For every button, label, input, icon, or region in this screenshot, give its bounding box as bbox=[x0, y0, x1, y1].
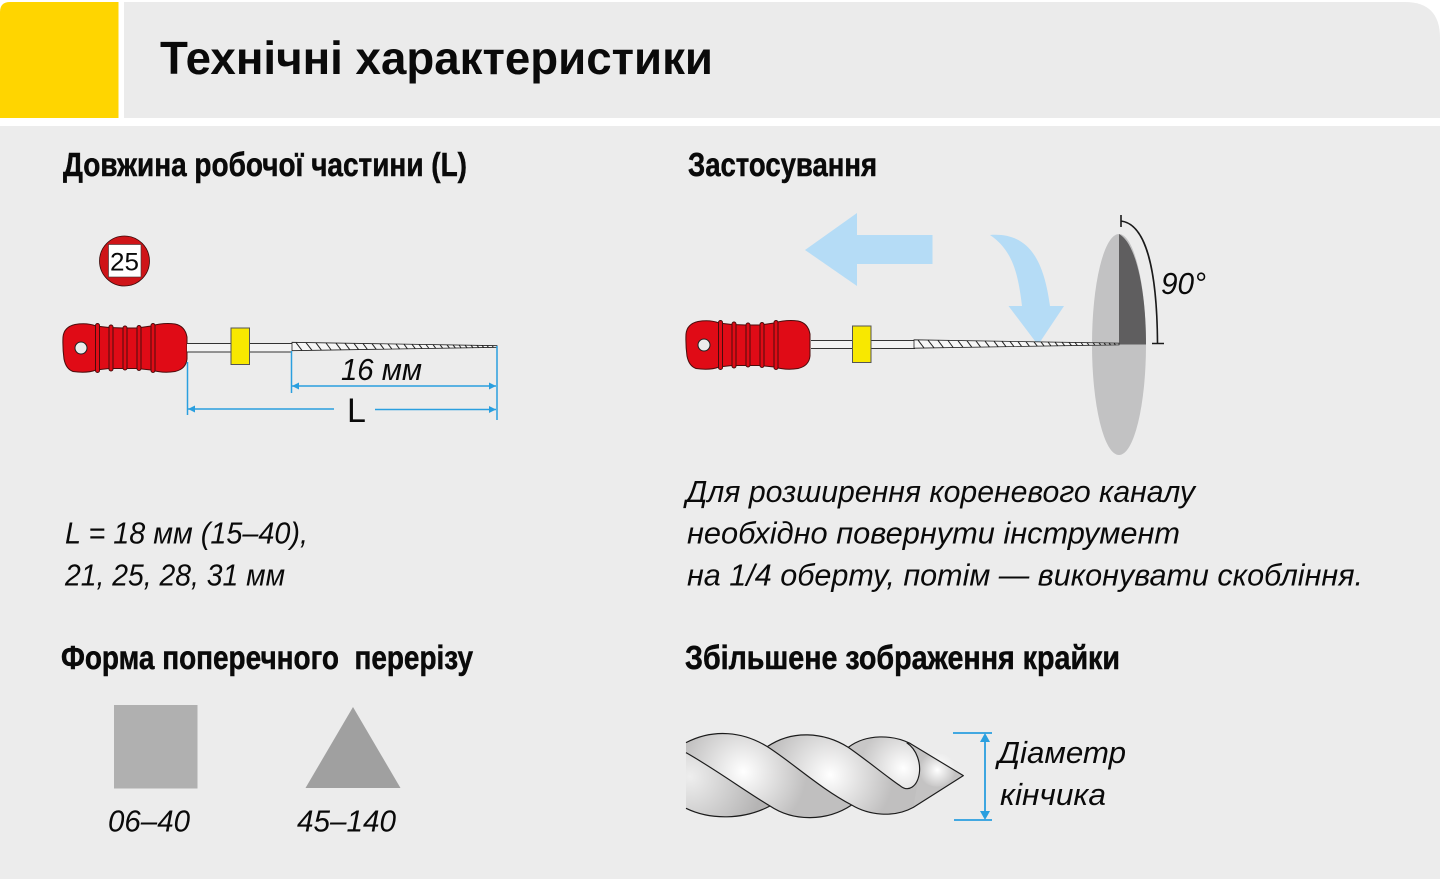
application description: Для розширення кореневого каналу bbox=[683, 474, 1197, 509]
yellow header block bbox=[0, 2, 118, 118]
icon: size 25 badge bbox=[100, 236, 150, 286]
cross-section: square: 06–40 bbox=[108, 804, 190, 838]
twisted working part bbox=[914, 340, 1119, 348]
dimension arrowheads bbox=[188, 382, 496, 413]
title: Технічні характеристики bbox=[160, 32, 713, 84]
application description: необхідно повернути інструмент bbox=[687, 516, 1180, 550]
application description bbox=[683, 474, 1363, 592]
shaft bbox=[187, 344, 300, 352]
cross-section: triangle: 45–140 bbox=[297, 804, 396, 838]
heading: enlarged tip: Збільшене зображення крайки bbox=[685, 639, 1120, 676]
length values: L = 18 мм (15–40), bbox=[65, 516, 308, 550]
length values bbox=[64, 516, 308, 592]
silicone stopper bbox=[231, 328, 250, 364]
application description: на 1/4 оберту, потім — виконувати скобління. bbox=[687, 558, 1363, 592]
first flute bbox=[686, 733, 852, 818]
middle flute bbox=[767, 735, 919, 814]
arrow: withdrawal bbox=[805, 213, 932, 286]
heading: application: Застосування bbox=[688, 146, 877, 183]
label: 90 degrees: 90° bbox=[1161, 266, 1206, 301]
cross-section: square bbox=[108, 705, 198, 838]
arrow: quarter turn bbox=[990, 235, 1064, 345]
lower wedge bbox=[686, 753, 770, 817]
silicone stopper bbox=[852, 326, 871, 362]
diagram: file with length dimensions bbox=[63, 324, 497, 430]
dimension lines bbox=[188, 346, 497, 420]
silhouette bbox=[686, 733, 963, 818]
illustration: enlarged tip bbox=[686, 733, 963, 818]
diagram: rotation of the file bbox=[686, 213, 1206, 455]
outlines bbox=[686, 733, 963, 818]
cross-section: triangle bbox=[297, 707, 400, 838]
twisted working part bbox=[292, 342, 497, 351]
length values: 21, 25, 28, 31 мм bbox=[64, 558, 285, 592]
header bar bbox=[124, 2, 1440, 118]
tip diameter dimension bbox=[953, 733, 992, 820]
label: L: L bbox=[347, 392, 366, 430]
label: tip diameter bbox=[995, 735, 1126, 812]
icon: size 25 badge: 25 bbox=[110, 248, 139, 276]
file handle bbox=[686, 320, 810, 370]
tip highlight bbox=[917, 753, 957, 787]
heading: cross-section: Форма поперечного перерізу bbox=[61, 639, 474, 676]
label: tip diameter: кінчика bbox=[1000, 777, 1106, 812]
heading: working length: Довжина робочої частини (L) bbox=[63, 146, 467, 183]
curled end bbox=[848, 737, 920, 789]
angle arc bbox=[1121, 215, 1164, 344]
label: tip diameter: Діаметр bbox=[995, 735, 1126, 770]
label: 16 mm: 16 мм bbox=[341, 352, 422, 387]
file handle bbox=[63, 324, 187, 372]
cross-section disc bbox=[1092, 234, 1146, 455]
shaft bbox=[811, 340, 921, 348]
